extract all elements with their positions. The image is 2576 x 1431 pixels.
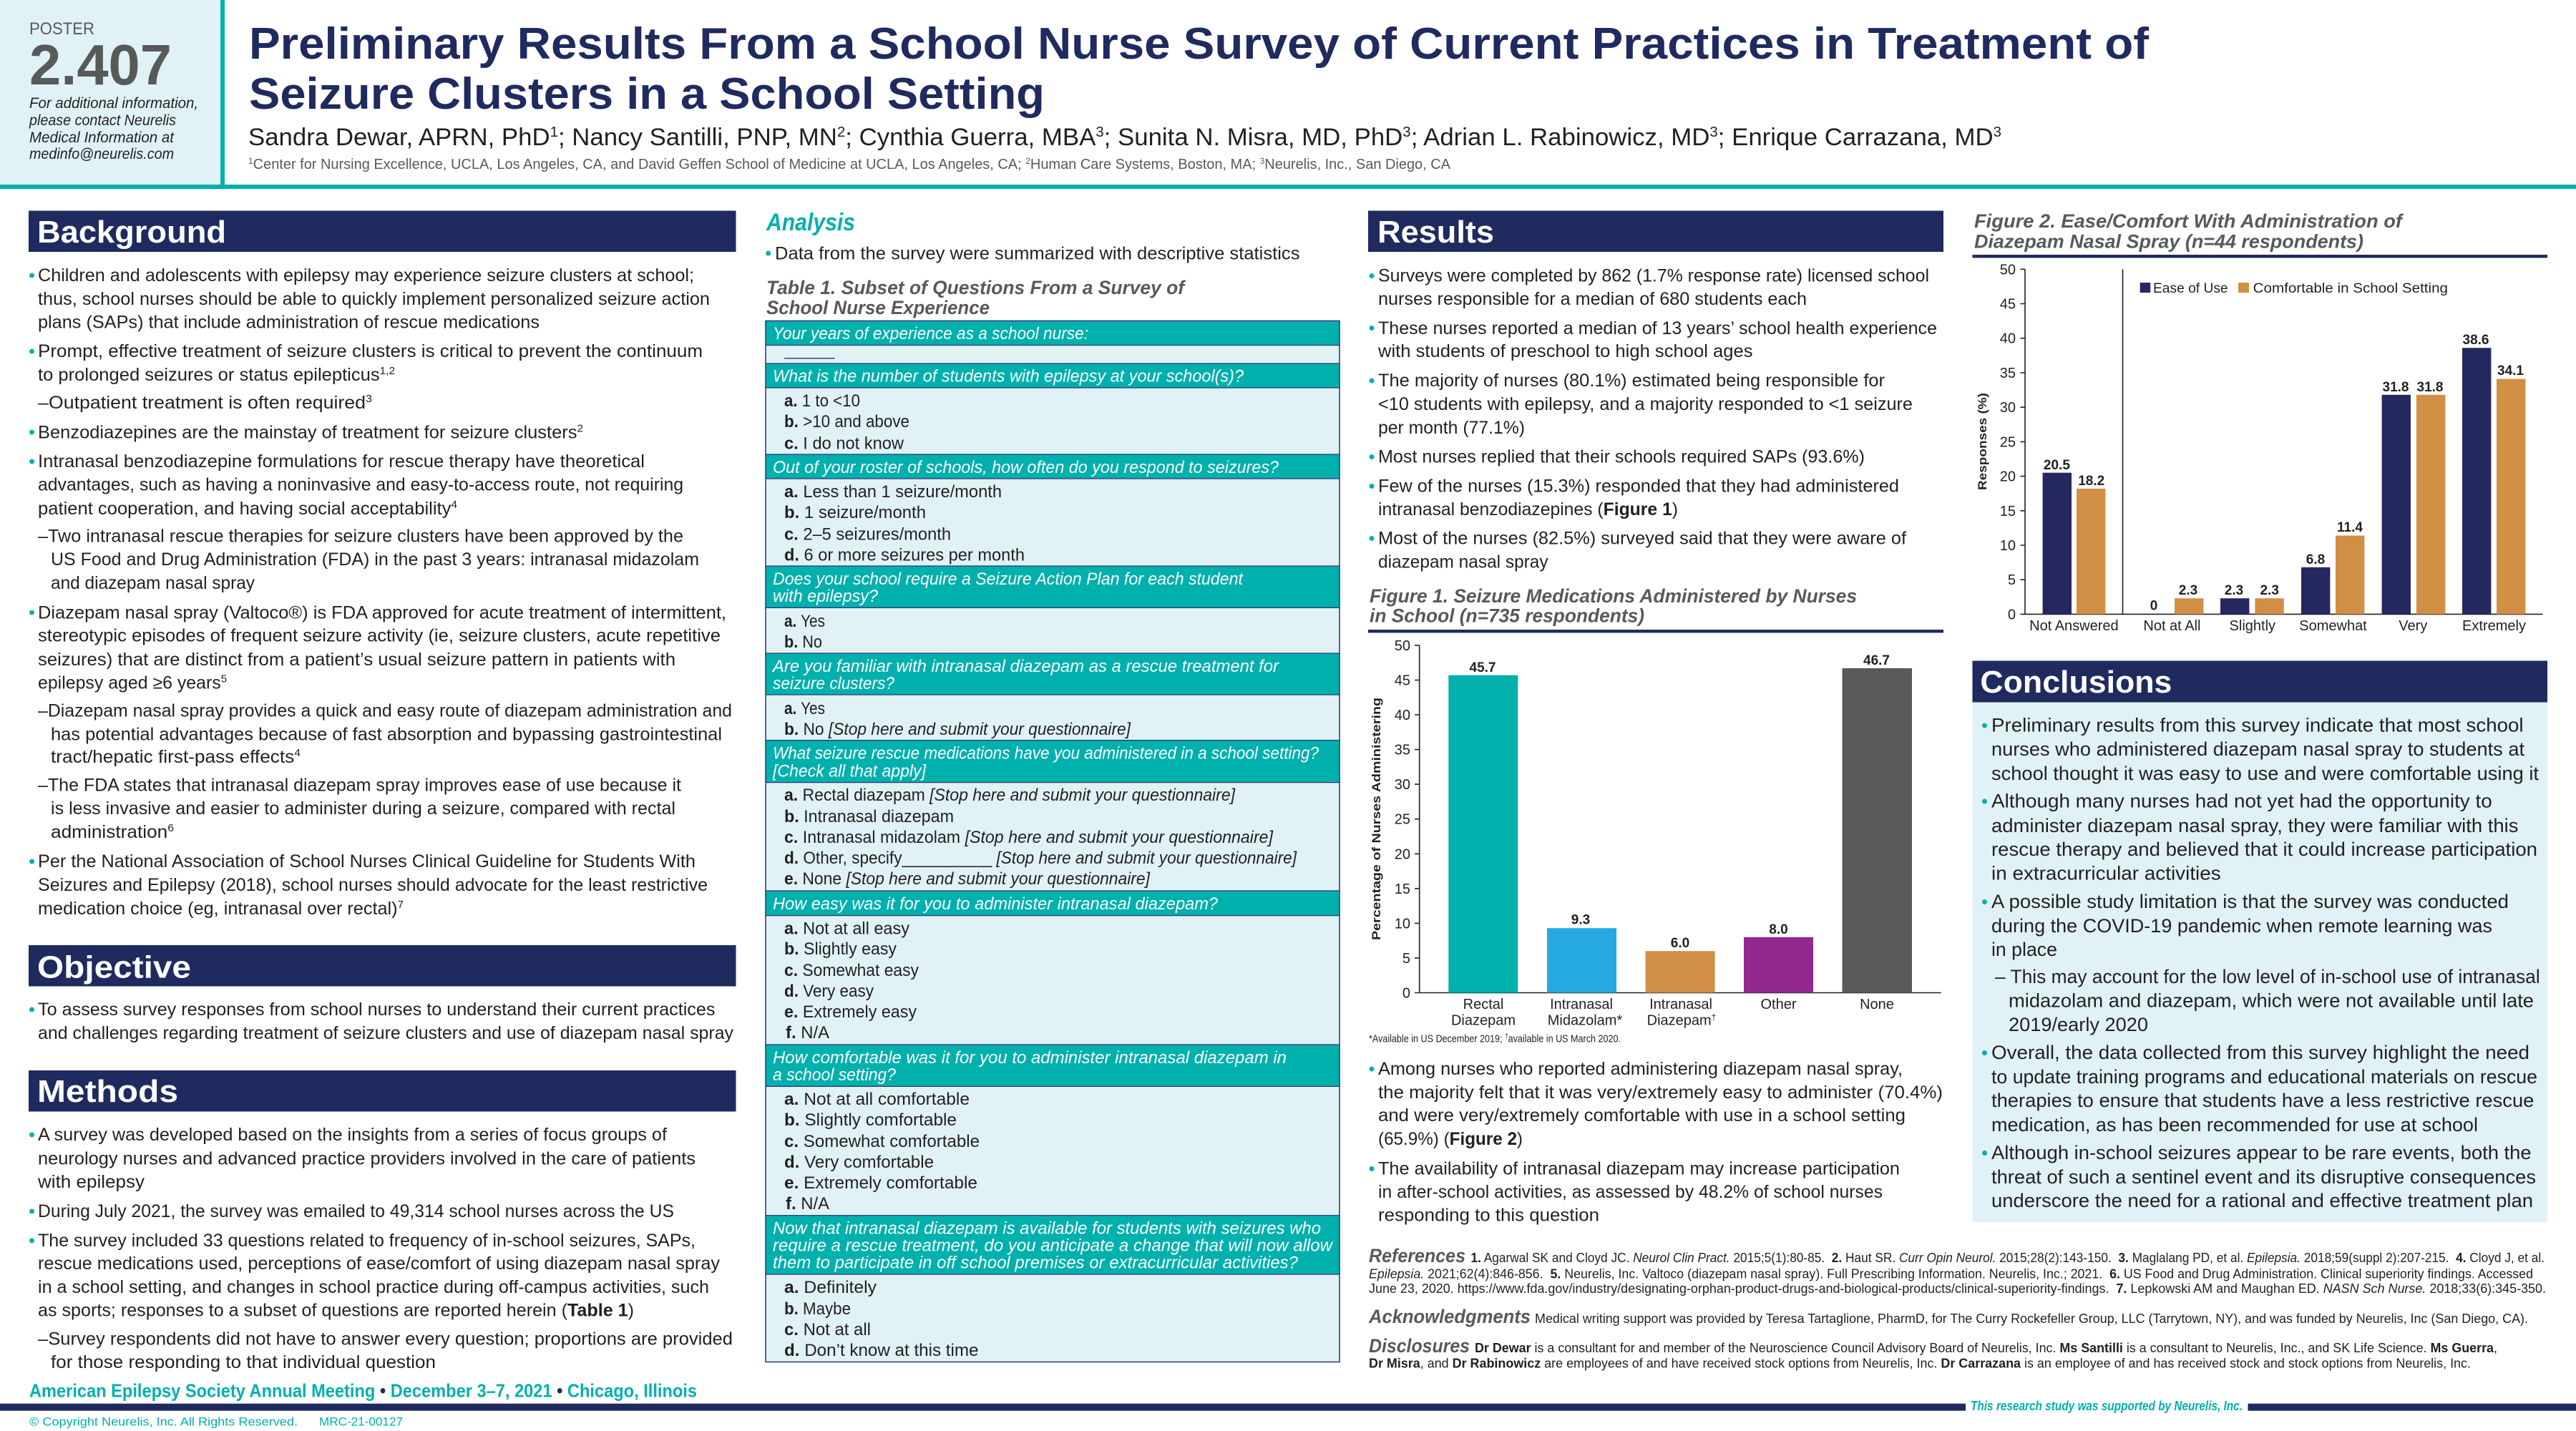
title: Preliminary Results From a School Nurse Survey of Current Practices in Treatment of: [249, 19, 2149, 69]
results text below figure 1: The availability of intranasal diazepam may increase participation: [1378, 1159, 1900, 1179]
group: slightly: 2.3: [2225, 583, 2243, 598]
results text below figure 1: (65.9%) (Figure 2): [1378, 1129, 1523, 1149]
y axis: 50: [2000, 262, 2016, 278]
panel: conclusions: Although many nurses had not yet had the opportunity to: [1991, 791, 2492, 812]
table title: School Nurse Experience: [766, 297, 990, 318]
question 2: What is the number of students with epilepsy at your school(s)?: [773, 367, 1244, 386]
group: slightly: Slightly: [2230, 618, 2275, 634]
disclosures: [1369, 1335, 2497, 1371]
panel: results: Most of the nurses (82.5%) surveyed said that they were aware of: [1378, 529, 1906, 549]
y axis title: Responses (%): [1976, 393, 1989, 490]
group: somewhat: 11.4: [2337, 520, 2363, 535]
y axis: 20: [1395, 846, 1410, 862]
panel: background: Seizures and Epilepsy (2018), school nurses should advocate for the least restrictive: [38, 875, 708, 895]
group: very: [2382, 380, 2445, 634]
y axis: 50: [1395, 638, 1410, 654]
y axis: [2000, 262, 2543, 622]
group: not answered: 20.5: [2044, 458, 2070, 473]
group: not answered: 18.2: [2078, 474, 2104, 489]
question 2: c. I do not know: [784, 434, 904, 454]
question 3: d. 6 or more seizures per month: [784, 546, 1025, 565]
panel: background: US Food and Drug Administration (FDA) in the past 3 years: intranasal midazolam: [51, 550, 699, 570]
bar: rectal diazepam: Rectal: [1463, 997, 1503, 1012]
panel: background: tract/hepatic first-pass effects: [51, 747, 283, 767]
panel: poster number: For additional information,: [29, 95, 198, 112]
legend: Ease of Use: [2153, 281, 2228, 296]
group: very: Very: [2399, 618, 2427, 634]
results text below figure 1: and were very/extremely comfortable with use in a school setting: [1378, 1105, 1906, 1125]
y axis: 15: [1395, 881, 1410, 897]
panel: methods: in a school setting, and changes in school practice during off-campus activities, such: [38, 1277, 709, 1297]
bar: intranasal midazolam: Intranasal: [1550, 997, 1613, 1012]
table title: Table 1. Subset of Questions From a Survey of: [766, 277, 1186, 298]
question 3: Out of your roster of schools, how often do you respond to seizures?: [773, 458, 1279, 477]
bar: intranasal diazepam: [1646, 936, 1716, 1029]
panel: background: –Outpatient treatment is often required: [38, 393, 344, 413]
bar: intranasal midazolam: [1547, 913, 1622, 1029]
authors: ; Cynthia Guerra, MBA: [845, 124, 1096, 151]
group: not at all: [2143, 583, 2203, 634]
bar: other: Other: [1760, 997, 1797, 1012]
question 6: [766, 741, 1340, 889]
panel: background: administration: [51, 822, 162, 842]
question 6: What seizure rescue medications have you administered in a school setting?: [773, 744, 1319, 763]
footer bar: This research study was supported by Neurelis, Inc.: [1971, 1399, 2243, 1413]
group: slightly: 2.3: [2260, 583, 2279, 598]
panel: background: plans (SAPs) that include administration of rescue medications: [38, 312, 540, 332]
question 7: f. N/A: [786, 1023, 829, 1042]
affiliations: Human Care Systems, Boston, MA;: [1030, 157, 1260, 172]
panel: conclusions: 2019/early 2020: [2009, 1014, 2148, 1035]
panel: background: Background: [37, 215, 226, 250]
question 4: Does your school require a Seizure Action Plan for each student: [773, 570, 1244, 589]
question 3: b. 1 seizure/month: [784, 503, 926, 522]
panel: background: 6: [167, 822, 174, 834]
bar chart: figure 1: [1370, 638, 1941, 1029]
panel: background: and diazepam nasal spray: [51, 573, 255, 593]
panel: methods: [29, 1070, 736, 1372]
panel: analysis: Data from the survey were summarized with descriptive statistics: [775, 244, 1299, 264]
question 9: Now that intranasal diazepam is available for students with seizures who: [773, 1219, 1321, 1238]
y axis: 25: [2000, 434, 2016, 450]
affiliations: 3: [1260, 156, 1265, 166]
y axis: 20: [2000, 469, 2016, 485]
panel: background: –Two intranasal rescue therapies for seizure clusters have been approved by the: [38, 527, 683, 547]
header rule: [0, 185, 2576, 189]
question 3: [766, 454, 1340, 565]
bar: rectal diazepam: [1448, 660, 1518, 1029]
panel: methods: The survey included 33 questions related to frequency of in-school seizures, SAPs,: [38, 1231, 696, 1251]
question 9: [766, 1216, 1340, 1360]
panel: background: 2: [577, 422, 583, 435]
figure 1 title: [1368, 585, 1943, 633]
authors: 3: [1096, 124, 1104, 140]
legend: [2140, 281, 2448, 296]
panel: background: [29, 210, 736, 919]
affiliations: 2: [1025, 156, 1030, 166]
panel: methods: as sports; responses to a subset of questions are reported herein (Table 1): [38, 1301, 634, 1321]
y axis: 15: [2000, 504, 2016, 519]
question 7: c. Somewhat easy: [784, 961, 919, 980]
panel: conclusions: therapies to ensure that students have a less restrictive rescue: [1991, 1090, 2534, 1111]
bar: intranasal diazepam: 6.0: [1671, 936, 1689, 951]
question 4: with epilepsy?: [773, 587, 879, 606]
authors: 3: [1709, 124, 1718, 140]
figure 1 footnote: available in US March 2020.: [1508, 1033, 1621, 1045]
question 9: b. Maybe: [784, 1299, 851, 1319]
disclosures: Dr Dewar is a consultant for and member of the Neuroscience Council Advisory Board of Neurelis, Inc. Ms Santilli is a consultant to Neurelis, Inc., and SK Life Science. Ms Guerra,: [1475, 1341, 2497, 1355]
panel: background: to prolonged seizures or status epilepticus: [38, 365, 372, 385]
references: Epilepsia. 2021;62(4):846-856. 5. Neurelis, Inc. Valtoco (diazepam nasal spray). Full Prescribing Information. Neurelis, Inc.; 2021. 6. US Food and Drug Administration. Clinical superiority findings. Accessed: [1369, 1267, 2533, 1281]
table: survey questions: [766, 321, 1340, 1362]
results text below figure 1: [1370, 1059, 1943, 1226]
group: somewhat: 6.8: [2306, 552, 2325, 567]
bar: none: 46.7: [1863, 653, 1890, 668]
panel: conclusions: underscore the need for a rational and effective treatment plan: [1991, 1190, 2533, 1211]
affiliations: Center for Nursing Excellence, UCLA, Los Angeles, CA, and David Geffen School of Medicine at UCLA, Los Angeles, CA;: [253, 157, 1025, 172]
title: Seizure Clusters in a School Setting: [249, 69, 1045, 119]
panel: methods: with epilepsy: [37, 1172, 145, 1192]
panel: background: 3: [366, 393, 372, 405]
panel: background: Children and adolescents with epilepsy may experience seizure clusters at school;: [38, 265, 694, 285]
question 2: [766, 363, 1340, 454]
group: very: 31.8: [2383, 380, 2409, 395]
panel: conclusions: medication, as has been recommended for use at school: [1991, 1114, 2478, 1135]
footer bar: [0, 1399, 2576, 1413]
question 9: c. Not at all: [784, 1320, 871, 1339]
y axis: 35: [2000, 366, 2016, 381]
panel: methods: Methods: [37, 1074, 178, 1109]
panel: results: These nurses reported a median of 13 years’ school health experience: [1378, 318, 1937, 338]
question 7: How easy was it for you to administer intranasal diazepam?: [773, 894, 1219, 914]
question 8: a. Not at all comfortable: [784, 1090, 970, 1109]
question 6: c. Intranasal midazolam [Stop here and submit your questionnaire]: [784, 828, 1274, 847]
panel: background: thus, school nurses should be able to quickly implement personalized seizure action: [38, 289, 710, 309]
question 1: [766, 321, 1340, 359]
copyright: [29, 1415, 403, 1429]
figure 2 title: Figure 2. Ease/Comfort With Administration of: [1974, 210, 2404, 232]
bar: intranasal diazepam: Diazepam: [1647, 1013, 1712, 1029]
panel: conclusions: during the COVID-19 pandemic when remote learning was: [1991, 915, 2492, 937]
question 9: require a rescue treatment, do you anticipate a change that will now allow: [773, 1236, 1334, 1256]
affiliations: 1: [248, 156, 253, 166]
panel: results: The majority of nurses (80.1%) estimated being responsible for: [1378, 371, 1885, 391]
y axis: 30: [1395, 777, 1410, 793]
figure 1 footnote: *Available in US December 2019;: [1369, 1033, 1528, 1045]
panel: results: [1368, 210, 1943, 572]
panel: background: Per the National Association of School Nurses Clinical Guideline for Students With: [38, 851, 696, 871]
panel: conclusions: threat of such a sentinel event and its disruptive consequences: [1991, 1166, 2536, 1188]
panel: conclusions: in place: [1991, 939, 2057, 960]
group: not at all: Not at All: [2143, 618, 2200, 634]
group: very: 31.8: [2417, 380, 2443, 395]
bar: intranasal diazepam: Intranasal: [1649, 997, 1712, 1012]
references: June 23, 2020. https://www.fda.gov/industry/designating-orphan-product-drugs-and-biological-products/clinical-superiority-findings. 7. Lepkowski AM and Maughan ED. NASN Sch Nurse. 2018;33(6):345-350.: [1369, 1281, 2546, 1296]
question 8: How comfortable was it for you to administer intranasal diazepam in: [773, 1048, 1287, 1068]
panel: results: Surveys were completed by 862 (1.7% response rate) licensed school: [1378, 266, 1929, 286]
panel: methods: rescue medications used, perceptions of ease/comfort of using diazepam nasal spray: [38, 1254, 720, 1274]
panel: methods: neurology nurses and advanced practice providers involved in the care of patients: [38, 1148, 696, 1168]
panel: conclusions: [1972, 661, 2547, 1222]
panel: analysis: [766, 209, 1299, 264]
panel: poster number: Medical Information at: [29, 130, 175, 146]
acknowledgments: [1368, 1306, 2528, 1327]
question 4: b. No: [784, 633, 822, 652]
panel: methods: for those responding to that individual question: [51, 1352, 436, 1372]
question 8: b. Slightly comfortable: [784, 1110, 957, 1130]
panel: conclusions: in extracurricular activities: [1991, 863, 2221, 884]
question 3: c. 2–5 seizures/month: [784, 525, 951, 544]
authors: ; Sunita N. Misra, MD, PhD: [1104, 124, 1402, 151]
group: extremely: 38.6: [2463, 333, 2489, 348]
panel: background: –The FDA states that intranasal diazepam spray improves ease of use because it: [38, 775, 681, 795]
panel: background: seizures) that are distinct from a patient’s usual seizure pattern in patients with: [38, 650, 675, 670]
figure 2 title: Diazepam Nasal Spray (n=44 respondents): [1974, 230, 2363, 252]
panel: results: Results: [1377, 215, 1494, 250]
panel: conclusions: rescue therapy and believed that it could increase participation: [1991, 839, 2537, 860]
authors: 3: [1994, 124, 2001, 140]
copyright: © Copyright Neurelis, Inc. All Rights Reserved.: [29, 1415, 298, 1429]
y axis title: Percentage of Nurses Administering: [1370, 698, 1383, 940]
question 1: Your years of experience as a school nurse:: [773, 324, 1088, 343]
question 7: d. Very easy: [784, 982, 874, 1001]
panel: results: <10 students with epilepsy, and a majority responded to <1 seizure: [1378, 394, 1913, 414]
panel: results: per month (77.1%): [1378, 418, 1525, 438]
group: slightly: [2220, 583, 2284, 634]
question 5: seizure clusters?: [773, 674, 895, 693]
panel: results: with students of preschool to high school ages: [1377, 341, 1753, 361]
y axis: 5: [1402, 951, 1410, 967]
panel: results: Few of the nurses (15.3%) responded that they had administered: [1378, 477, 1899, 497]
panel: conclusions: Although in-school seizures appear to be rare events, both the: [1991, 1142, 2532, 1163]
panel: conclusions: nurses who administered diazepam nasal spray to students at: [1991, 738, 2524, 760]
y axis: 40: [1395, 708, 1410, 723]
panel: background: stereotypic episodes of frequent seizure activity (ie, seizure clusters, acute repetitive: [38, 625, 721, 645]
results text below figure 1: responding to this question: [1378, 1206, 1599, 1226]
panel: background: Prompt, effective treatment of seizure clusters is critical to prevent the continuum: [38, 341, 703, 361]
panel: background: 4: [451, 499, 457, 511]
question 2: a. 1 to <10: [784, 391, 860, 411]
panel: objective: Objective: [37, 950, 191, 985]
panel: background: epilepsy aged ≥6 years: [38, 673, 222, 693]
question 7: a. Not at all easy: [784, 919, 909, 939]
acknowledgments: Medical writing support was provided by Teresa Tartaglione, PharmD, for The Curry Rockefeller Group, LLC (Tarrytown, NY), and was funded by Neurelis, Inc (San Diego, CA).: [1535, 1312, 2528, 1326]
panel: background: 7: [398, 899, 404, 911]
results text below figure 1: in after-school activities, as assessed by 48.2% of school nurses: [1378, 1182, 1883, 1202]
y axis: 35: [1395, 743, 1410, 758]
panel: background: has potential advantages because of fast absorption and bypassing gastrointestinal: [51, 724, 722, 744]
y axis: 5: [2008, 572, 2016, 588]
panel: conclusions: – This may account for the low level of in-school use of intranasal: [1995, 966, 2540, 987]
panel: conclusions: to update training programs and educational materials on rescue: [1991, 1066, 2537, 1088]
legend: Comfortable in School Setting: [2253, 281, 2448, 296]
group: extremely: [2462, 333, 2526, 634]
figure 2 title: [1972, 210, 2547, 258]
question 5: Are you familiar with intranasal diazepam as a rescue treatment for: [771, 657, 1279, 676]
figure 1 footnote: †: [1505, 1033, 1508, 1041]
panel: conclusions: Preliminary results from this survey indicate that most school: [1991, 714, 2524, 736]
y axis: 0: [1402, 986, 1410, 1002]
question 8: a school setting?: [773, 1065, 897, 1085]
bar: none: [1842, 653, 1912, 1012]
question 9: a. Definitely: [784, 1278, 877, 1297]
bar chart: figure 2: [1976, 262, 2543, 634]
question 6: e. None [Stop here and submit your questionnaire]: [784, 869, 1151, 889]
question 9: d. Don’t know at this time: [784, 1341, 979, 1360]
question 8: c. Somewhat comfortable: [784, 1132, 980, 1151]
y axis: 45: [1395, 673, 1410, 688]
panel: methods: During July 2021, the survey was emailed to 49,314 school nurses across the US: [38, 1201, 674, 1221]
panel: results: intranasal benzodiazepines (Figure 1): [1378, 499, 1678, 519]
question 8: f. N/A: [786, 1194, 829, 1213]
group: not at all: 0: [2150, 599, 2157, 614]
bar: none: None: [1860, 997, 1894, 1012]
question 5: a. Yes: [784, 699, 825, 718]
group: not at all: 2.3: [2179, 583, 2197, 598]
question 6: [Check all that apply]: [772, 762, 927, 781]
y axis: 40: [2000, 331, 2016, 347]
authors: 2: [837, 124, 845, 140]
panel: methods: A survey was developed based on the insights from a series of focus groups of: [38, 1125, 667, 1145]
disclosures: Dr Misra, and Dr Rabinowicz are employees of and have received stock options from Neurelis, Inc. Dr Carrazana is an employee of and has received stock and stock options from Neurelis, Inc.: [1369, 1357, 2471, 1371]
group: extremely: Extremely: [2462, 618, 2526, 634]
question 6: b. Intranasal diazepam: [784, 807, 954, 826]
disclosures: Disclosures: [1369, 1335, 1470, 1357]
panel: poster number: POSTER: [29, 19, 94, 39]
question 6: d. Other, specify__________ [Stop here and submit your questionnaire]: [784, 849, 1297, 868]
question 8: e. Extremely comfortable: [784, 1173, 977, 1193]
authors: 3: [1402, 124, 1411, 140]
figure 1 title: in School (n=735 respondents): [1370, 605, 1644, 626]
panel: background: Diazepam nasal spray (Valtoco®) is FDA approved for acute treatment of intermittent,: [38, 602, 726, 622]
question 8: d. Very comfortable: [784, 1153, 934, 1172]
bar: intranasal midazolam: Midazolam*: [1548, 1013, 1622, 1029]
y axis: 0: [2008, 607, 2016, 622]
panel: poster number: [0, 0, 225, 185]
authors: 1: [550, 124, 558, 140]
table title: [766, 277, 1186, 318]
panel: conclusions: midazolam and diazepam, which were not available until late: [2009, 990, 2534, 1012]
group: somewhat: [2299, 520, 2367, 634]
references: [1369, 1245, 2546, 1296]
bar: rectal diazepam: 45.7: [1470, 660, 1496, 675]
panel: objective: To assess survey responses from school nurses to understand their current practices: [38, 1000, 716, 1020]
question 2: b. >10 and above: [784, 412, 909, 431]
y axis: 25: [1395, 812, 1410, 828]
question 5: [766, 653, 1340, 739]
panel: poster number: please contact Neurelis: [29, 112, 176, 129]
panel: background: 4: [294, 747, 301, 759]
panel: conclusions: Conclusions: [1980, 665, 2172, 700]
authors: ; Adrian L. Rabinowicz, MD: [1411, 124, 1709, 151]
panel: background: is less invasive and easier to administer during a seizure, compared with rectal: [51, 798, 675, 819]
panel: background: Intranasal benzodiazepine formulations for rescue therapy have theoretical: [38, 451, 645, 472]
panel: background: medication choice (eg, intranasal over rectal): [38, 899, 394, 919]
panel: background: –Diazepam nasal spray provides a quick and easy route of diazepam administration and: [38, 701, 732, 721]
references: References: [1369, 1245, 1465, 1266]
question 7: b. Slightly easy: [784, 939, 897, 959]
question 5: b. No [Stop here and submit your questionnaire]: [784, 720, 1131, 739]
panel: results: nurses responsible for a median of 680 students each: [1378, 289, 1807, 309]
acknowledgments: Acknowledgments: [1368, 1306, 1531, 1327]
affiliations: Neurelis, Inc., San Diego, CA: [1264, 157, 1451, 172]
authors: ; Enrique Carrazana, MD: [1718, 124, 1994, 151]
panel: background: patient cooperation, and having social acceptability: [38, 499, 441, 519]
meeting line: American Epilepsy Society Annual Meeting • December 3–7, 2021 • Chicago, Illinois: [29, 1380, 697, 1402]
authors: Sandra Dewar, APRN, PhD: [248, 124, 543, 151]
question 4: [766, 566, 1340, 652]
panel: results: diazepam nasal spray: [1378, 552, 1548, 572]
bar: intranasal diazepam: †: [1712, 1012, 1716, 1022]
copyright: MRC-21-00127: [319, 1415, 403, 1429]
panel: background: 5: [221, 673, 227, 685]
panel: conclusions: administer diazepam nasal spray, they were familiar with this: [1991, 815, 2519, 836]
panel: analysis: Analysis: [766, 209, 855, 236]
y axis: 10: [2000, 538, 2016, 554]
question 4: a. Yes: [784, 612, 825, 631]
bar: other: 8.0: [1769, 922, 1788, 937]
figure 1 title: Figure 1. Seizure Medications Administered by Nurses: [1370, 585, 1857, 607]
y axis: 45: [2000, 296, 2016, 312]
results text below figure 1: Among nurses who reported administering diazepam nasal spray,: [1378, 1059, 1903, 1079]
y axis: [1395, 638, 1941, 1002]
authors: ; Nancy Santilli, PNP, MN: [558, 124, 837, 151]
question 7: e. Extremely easy: [784, 1002, 917, 1022]
y axis: 30: [2000, 400, 2016, 416]
question 9: them to participate in off school premises or extracurricular activities?: [773, 1254, 1299, 1273]
title: [249, 19, 2149, 119]
panel: background: Benzodiazepines are the mainstay of treatment for seizure clusters: [38, 422, 567, 442]
panel: conclusions: school thought it was easy to use and were comfortable using it: [1991, 763, 2539, 784]
question 8: [766, 1045, 1340, 1213]
group: extremely: 34.1: [2497, 363, 2524, 378]
bar: intranasal midazolam: 9.3: [1571, 913, 1590, 928]
references: 1. Agarwal SK and Cloyd JC. Neurol Clin Pract. 2015;5(1):80-85. 2. Haut SR. Curr Opin Neurol. 2015;28(2):143-150. 3. Maglalang PD, et al. Epilepsia. 2018;59(suppl 2):207-215. 4. Cloyd J, et al.: [1471, 1251, 2545, 1265]
panel: poster number: medinfo@neurelis.com: [29, 146, 174, 162]
panel: conclusions: A possible study limitation is that the survey was conducted: [1991, 891, 2509, 912]
question 3: a. Less than 1 seizure/month: [784, 482, 1002, 502]
question 6: a. Rectal diazepam [Stop here and submit your questionnaire]: [784, 786, 1236, 805]
bar: other: [1744, 922, 1813, 1012]
panel: background: 1,2: [380, 365, 395, 377]
panel: background: advantages, such as having a noninvasive and easy-to-access route, not requiring: [38, 475, 683, 495]
group: not answered: [2029, 458, 2119, 634]
results text below figure 1: the majority felt that it was very/extremely easy to administer (70.4%): [1378, 1083, 1943, 1103]
y axis: 10: [1395, 916, 1410, 932]
group: somewhat: Somewhat: [2299, 618, 2367, 634]
question 7: [766, 891, 1340, 1042]
panel: conclusions: Overall, the data collected from this survey highlight the need: [1991, 1042, 2529, 1063]
panel: poster number: 2.407: [29, 33, 172, 97]
panel: methods: –Survey respondents did not have to answer every question; proportions are provided: [38, 1329, 733, 1349]
panel: objective: [29, 945, 736, 1043]
bar: rectal diazepam: Diazepam: [1451, 1013, 1516, 1029]
panel: results: Most nurses replied that their schools required SAPs (93.6%): [1378, 447, 1865, 467]
group: not answered: Not Answered: [2029, 618, 2119, 634]
panel: objective: and challenges regarding treatment of seizure clusters and use of diazepam nasal spray: [38, 1023, 733, 1043]
